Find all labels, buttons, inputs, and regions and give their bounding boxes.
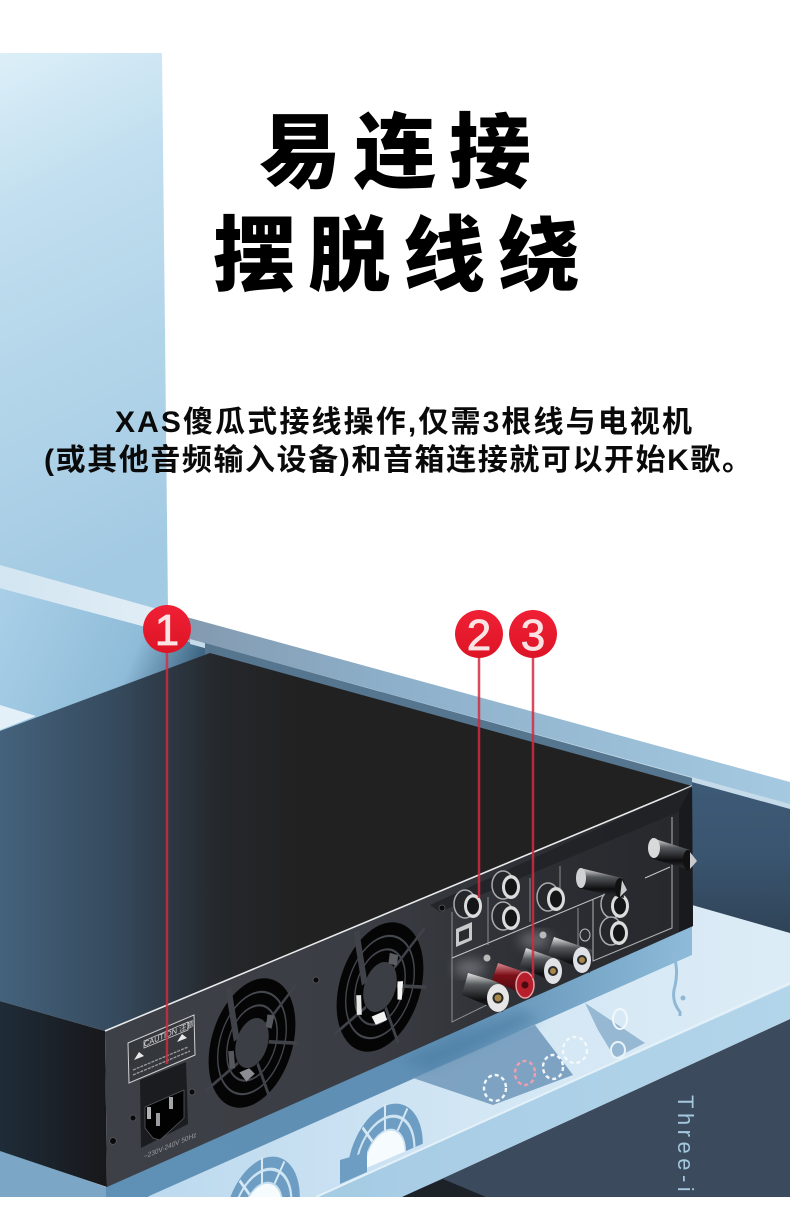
callout 2: audio input: 2 xyxy=(467,611,491,660)
amplifier rear face xyxy=(105,786,693,1187)
shelf front edge highlight xyxy=(316,983,790,1197)
lower wall behind amplifier xyxy=(0,588,215,732)
shelf cast shadow xyxy=(106,925,692,1197)
panel: blue backdrop wall xyxy=(0,53,168,612)
upper shelf band right xyxy=(160,612,790,808)
shelf light surface xyxy=(147,905,790,1197)
panel: product scene with shelf xyxy=(0,565,790,1206)
icon: fan 2 xyxy=(334,901,426,1071)
binding post top 1 xyxy=(576,868,627,898)
right bevel xyxy=(430,786,692,912)
description text: (或其他音频输入设备)和音箱连接就可以开始K歌。 xyxy=(44,444,752,477)
callout 3: speaker output xyxy=(509,610,557,978)
power socket xyxy=(140,1062,197,1161)
upper shelf light band xyxy=(0,565,190,642)
vertical caption: Three-i: Three-i xyxy=(673,1095,698,1196)
icon: fan 1 xyxy=(206,957,298,1127)
callout 3: speaker output: 3 xyxy=(521,611,545,660)
title: 易连接 xyxy=(259,108,531,199)
shelf front edge band xyxy=(316,985,790,1197)
callout 1: power xyxy=(143,605,191,1064)
description text xyxy=(44,406,752,477)
under-shelf black wedge xyxy=(400,1179,486,1197)
title: 摆脱线绕 xyxy=(213,211,580,302)
power socket: ~230V-240V 50Hz xyxy=(144,1132,197,1161)
reflection of jacks panel xyxy=(585,1003,645,1058)
left floor area xyxy=(0,1150,150,1197)
RCA jacks xyxy=(454,871,629,945)
light ledge at left xyxy=(0,705,36,730)
callout 2: audio input xyxy=(455,610,503,898)
shadow blobs xyxy=(414,1012,540,1066)
binding post top 2 xyxy=(648,838,697,870)
reflected bracket xyxy=(672,952,680,1016)
reflection of speaker posts panel xyxy=(413,1025,573,1105)
reflected speaker posts xyxy=(484,1037,587,1101)
right mounting bracket xyxy=(679,786,693,932)
caution label: CAUTION 注意 xyxy=(144,1018,194,1049)
callout 1: power: 1 xyxy=(155,606,179,655)
shadow strip under band xyxy=(205,643,692,788)
back wall at right xyxy=(692,782,790,933)
amplifier top face xyxy=(0,653,692,1031)
description text: XAS傻瓜式接线操作,仅需3根线与电视机 xyxy=(115,406,692,439)
title xyxy=(213,108,580,302)
screw holes xyxy=(110,905,445,1144)
reflected jacks xyxy=(611,1009,627,1058)
glow behind posts xyxy=(454,932,551,976)
large speaker posts xyxy=(462,932,592,1012)
amplifier xyxy=(0,653,697,1187)
under-shelf dark area xyxy=(402,1019,790,1197)
rear panel outlines xyxy=(452,817,672,1022)
shelf band highlight xyxy=(190,639,790,809)
caution label xyxy=(128,1015,195,1083)
top edge highlight xyxy=(105,786,692,1031)
CCC mark xyxy=(580,929,590,941)
optical port xyxy=(456,922,472,947)
amplifier left side xyxy=(0,1001,107,1187)
reflected fans xyxy=(230,1104,423,1197)
